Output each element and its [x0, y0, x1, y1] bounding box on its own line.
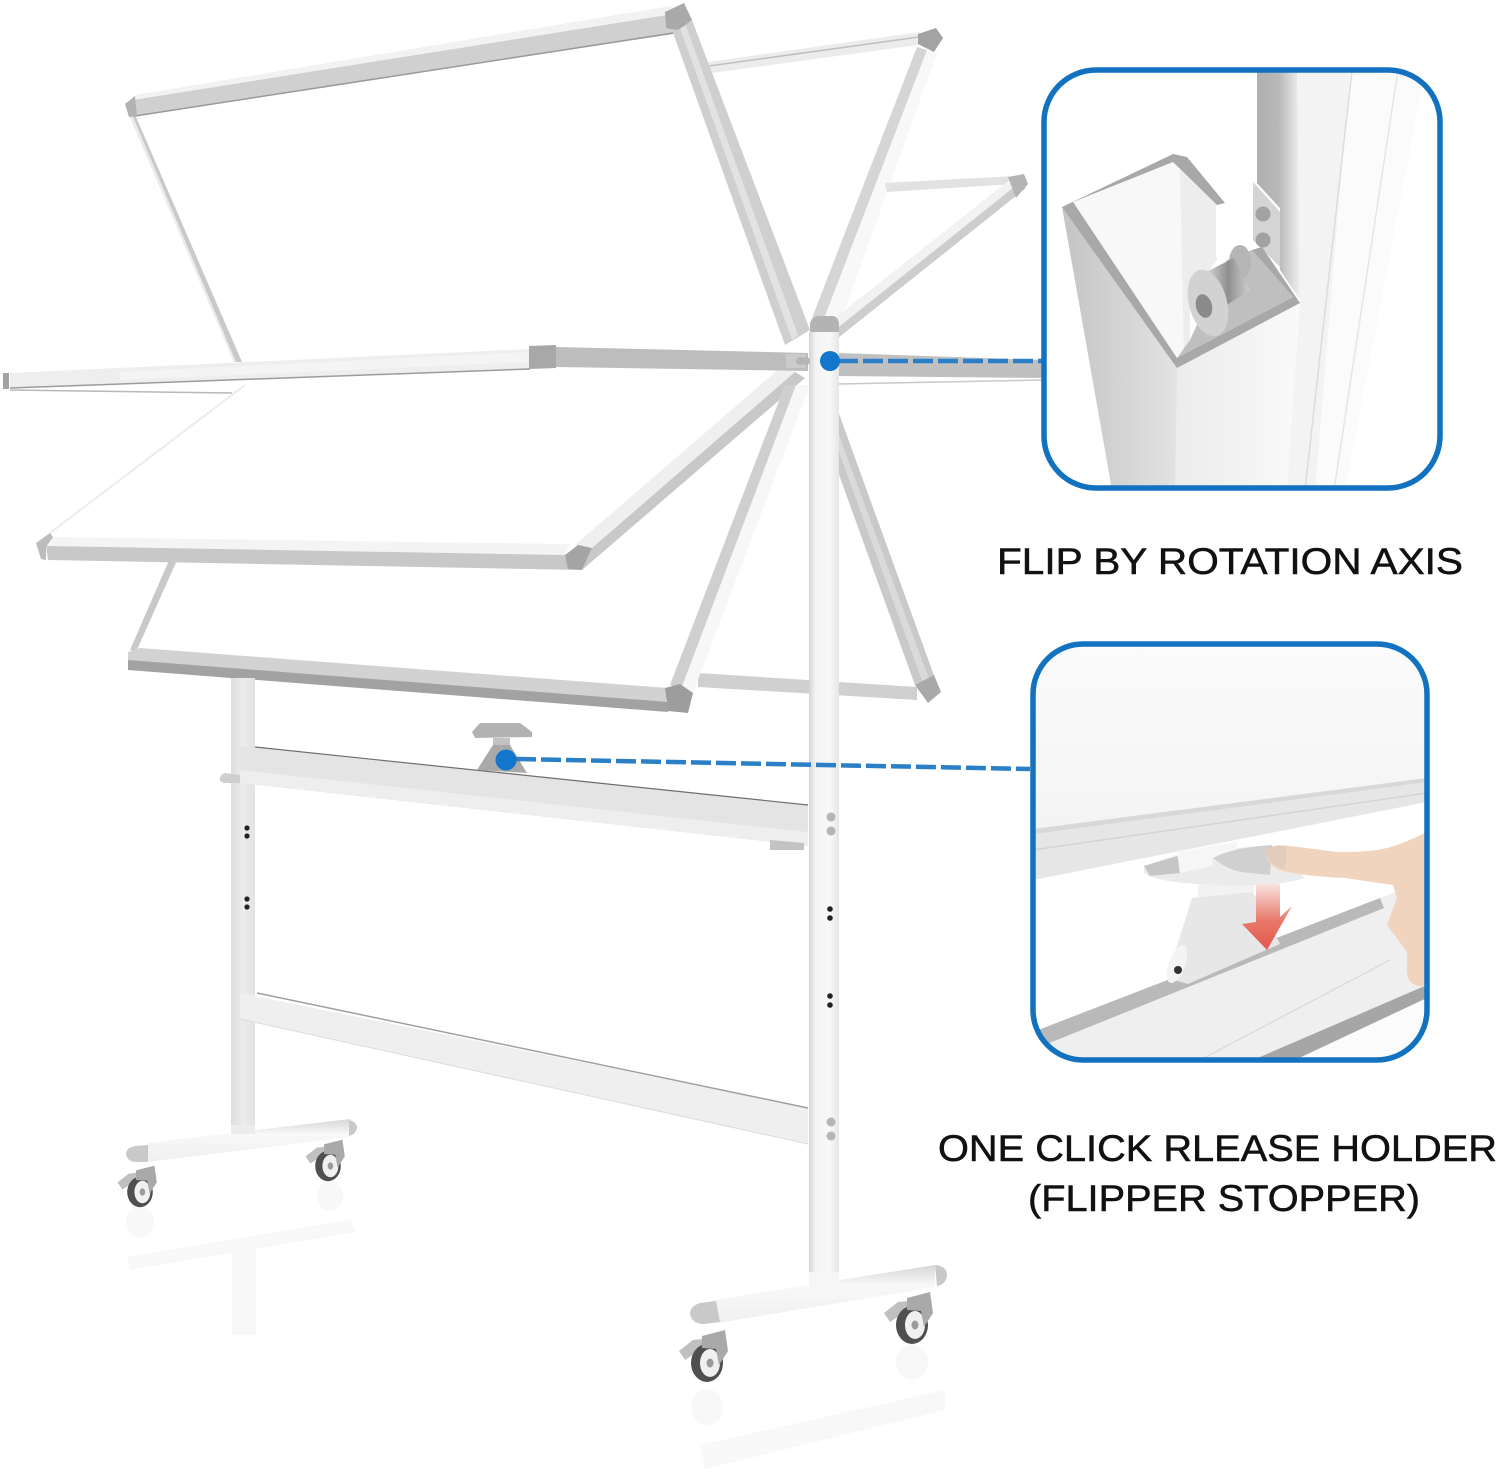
caption: one click release holder: [938, 1128, 1497, 1219]
board: top left: [125, 3, 810, 362]
caption: one click release holder: (FLIPPER STOPPER): [1028, 1178, 1420, 1219]
panel: one click release holder close-up: [1033, 644, 1427, 1060]
board: horizontal edge-on: [3, 345, 808, 393]
square tube: [1062, 154, 1300, 490]
tray: [1040, 892, 1424, 1058]
pivot bolts: [796, 357, 836, 1140]
floor reflections: [126, 1181, 945, 1469]
stopper: [1144, 842, 1305, 986]
left foot: [118, 1119, 357, 1207]
adjustment holes: [244, 825, 833, 1008]
back board: lower right: [698, 400, 941, 703]
marker tray: [220, 746, 808, 850]
caption: one click release holder: ONE CLICK RLEASE HOLDER: [938, 1128, 1497, 1169]
board: bottom: [128, 385, 810, 713]
pivot bolt: [1188, 245, 1251, 336]
board: lower left: [36, 368, 805, 570]
flipper stopper on the tray: [472, 723, 532, 773]
back board: far right: [835, 174, 1028, 338]
right foot: [679, 1265, 947, 1382]
left post: [231, 678, 255, 1136]
right post: [809, 316, 839, 1292]
connector: flipper stopper: [496, 750, 1030, 770]
whiteboard frame behind: [1253, 72, 1398, 486]
lower crossbar: [240, 993, 808, 1144]
caption: flip by rotation axis: FLIP BY ROTATION AXIS: [997, 541, 1463, 582]
stand: [118, 316, 947, 1382]
red arrow: [1242, 884, 1292, 950]
connector: rotation axis: [820, 351, 1042, 371]
panel: rotation axis close-up: [1044, 70, 1440, 490]
right horizontal edge: [838, 353, 1042, 378]
main board positions: [3, 3, 810, 713]
back flip positions of the board: [698, 28, 1042, 703]
finger and hand: [1265, 832, 1427, 988]
back board: upper right: [708, 28, 943, 318]
whiteboard surface: [1036, 751, 1424, 828]
whiteboard frame: [1033, 778, 1427, 880]
